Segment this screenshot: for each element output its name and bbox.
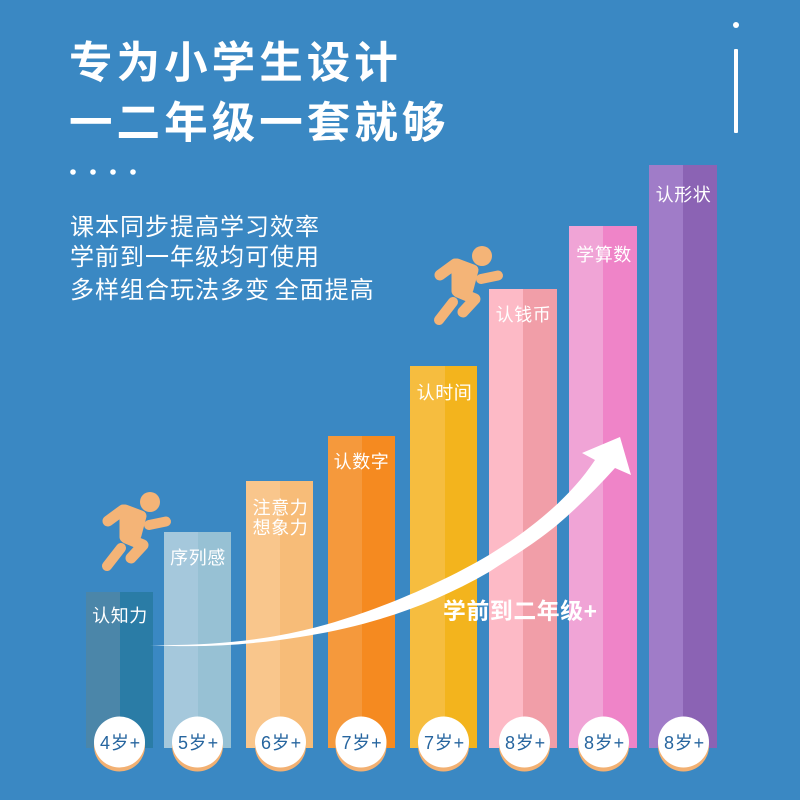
description text: 多样组合玩法多变 全面提高 xyxy=(70,277,375,304)
bar: 学算数 xyxy=(569,226,637,748)
age badge 6 xyxy=(255,716,306,772)
bar: 注意力 想象力: 注意力 xyxy=(253,498,308,518)
arrow label: 学前到二年级+ xyxy=(443,598,598,624)
age badge 8 third: 8岁+ xyxy=(664,733,705,753)
bar: 认数字: 认数字 xyxy=(334,452,389,472)
description text: 课本同步提高学习效率 xyxy=(70,214,320,241)
age badge 7: 7岁+ xyxy=(342,733,382,753)
age badge 8 first xyxy=(499,716,550,772)
age badge 4: 4岁+ xyxy=(100,733,141,753)
age badge 8 second: 8岁+ xyxy=(584,733,625,753)
age badge 5: 5岁+ xyxy=(178,733,219,753)
bar: 认形状 xyxy=(649,165,717,748)
bar: 注意力 想象力 xyxy=(246,481,313,748)
age badge 7 xyxy=(336,716,386,772)
icon: runner lower xyxy=(107,492,166,566)
bar: 认知力: 认知力 xyxy=(92,606,148,626)
growth arrow xyxy=(150,437,631,646)
age badge 7 second xyxy=(418,716,469,772)
bar: 认数字 xyxy=(328,436,395,748)
bar: 序列感 xyxy=(164,532,231,748)
title xyxy=(69,40,449,148)
age badge 6: 6岁+ xyxy=(261,733,302,753)
age badge 5 xyxy=(172,716,223,772)
title: 一二年级一套就够 xyxy=(69,100,449,148)
icon: runner upper xyxy=(439,246,498,320)
four dots decoration xyxy=(70,169,136,175)
title: 专为小学生设计 xyxy=(69,40,402,88)
description text: 学前到一年级均可使用 xyxy=(70,244,320,271)
bar: 认时间: 认时间 xyxy=(417,383,472,403)
age badge 8 third xyxy=(658,716,709,772)
top right dot and line xyxy=(733,22,739,133)
bar: 认钱币 xyxy=(489,289,557,748)
age badge 7 second: 7岁+ xyxy=(424,733,465,753)
bar: 认形状: 认形状 xyxy=(656,185,711,205)
age badge 8 first: 8岁+ xyxy=(505,733,546,753)
bar: 注意力 想象力: 想象力 xyxy=(253,518,308,538)
description text xyxy=(70,214,375,304)
bar: 学算数: 学算数 xyxy=(576,245,632,265)
bar: 序列感: 序列感 xyxy=(170,548,226,568)
bar: 认知力 xyxy=(86,592,153,748)
age badge 4 xyxy=(94,716,145,772)
bar: 认钱币: 认钱币 xyxy=(496,305,551,325)
age badge 8 second xyxy=(578,716,629,772)
bar: 认时间 xyxy=(410,366,477,748)
